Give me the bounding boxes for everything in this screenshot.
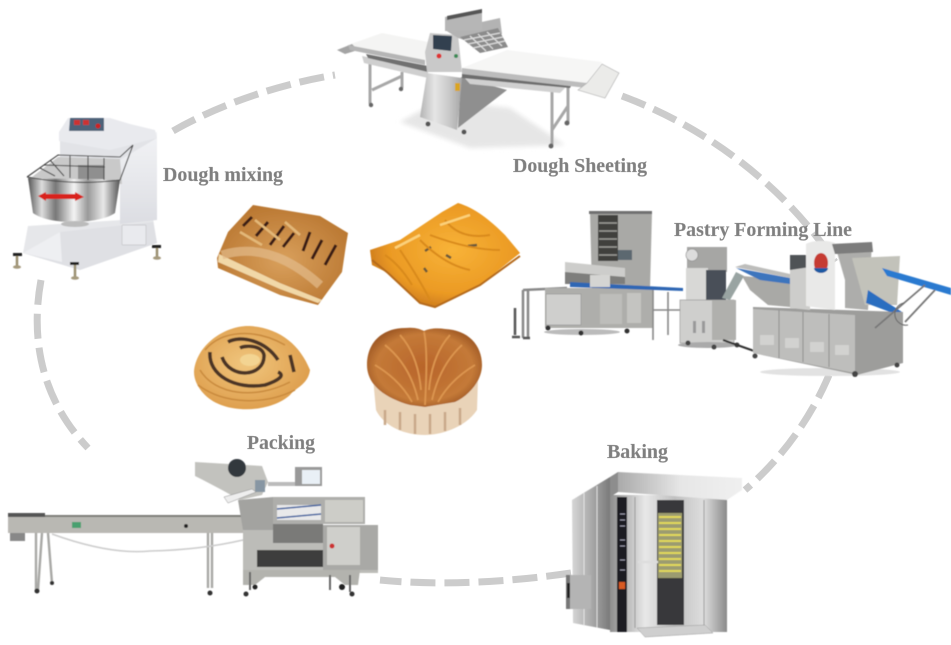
label: Dough mixing: Dough mixing	[163, 164, 283, 186]
label: Pastry Forming Line: Pastry Forming Line	[674, 219, 852, 241]
icon: spiral dough mixer	[13, 118, 161, 280]
dashed process ring	[37, 75, 835, 583]
pastry: slit turnover	[217, 205, 348, 305]
icon: pastry forming line	[512, 211, 951, 377]
label: Packing: Packing	[247, 432, 315, 454]
pastry: poppy seed swirl	[194, 326, 310, 409]
icon: dough sheeter	[337, 9, 619, 148]
pastry: glazed pocket	[370, 203, 520, 307]
label: Dough Sheeting: Dough Sheeting	[513, 155, 647, 177]
pastry: laminated cup brioche	[367, 328, 482, 435]
icon: flow packing machine	[8, 459, 378, 596]
icon: rotary baking oven	[566, 472, 742, 637]
label: Baking: Baking	[607, 441, 668, 463]
